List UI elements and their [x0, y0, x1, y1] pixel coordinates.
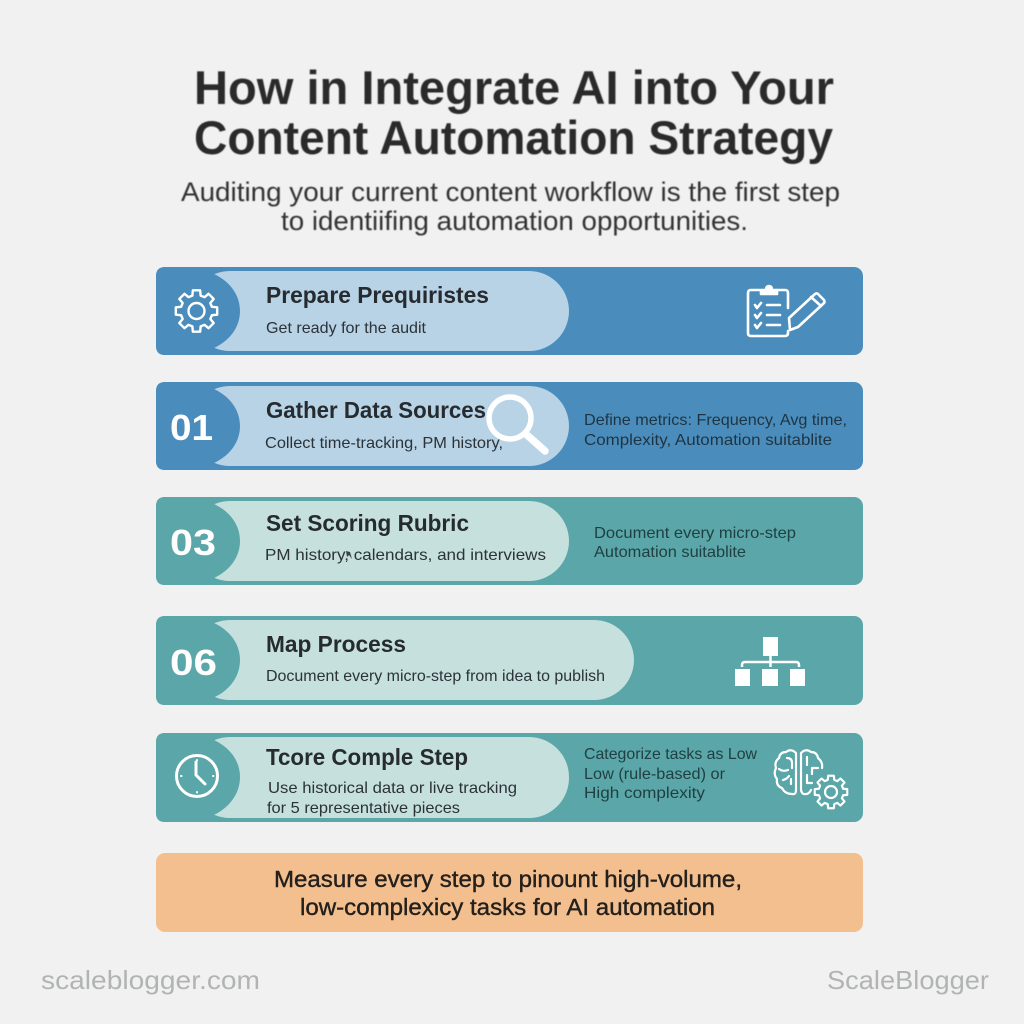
subtitle — [181, 177, 840, 236]
description: prepare: Get ready for the audit — [266, 320, 427, 337]
step number: 01: 01 — [170, 407, 213, 448]
description: score: for 5 representative pieces — [267, 800, 460, 817]
icon: clipboard and pencil — [748, 286, 824, 336]
subtitle: Auditing your current content workflow is the first step — [181, 177, 840, 207]
heading: score: Tcore Comple Step — [266, 744, 468, 770]
footer: website: scaleblogger.com — [41, 965, 260, 995]
side note: document steps — [594, 525, 796, 561]
side note: categorize: Low (rule-based) or — [584, 766, 726, 783]
description: scoring: PM history, calendars, and interviews — [265, 547, 546, 564]
callout: key takeaway: Measure every step to pinount high-volume, — [274, 866, 742, 892]
title: Content Automation Strategy — [194, 111, 833, 164]
icon: magnifying glass — [489, 397, 545, 451]
step number: 06: 06 — [170, 642, 217, 683]
callout: key takeaway: low-complexicy tasks for AI automation — [300, 894, 715, 920]
icon: gear — [176, 290, 217, 332]
heading: scoring: Set Scoring Rubric — [266, 510, 469, 536]
panel: set scoring rubric — [156, 497, 863, 585]
subtitle: to identiifing automation opportunities. — [281, 206, 748, 236]
panel: prepare prerequisites — [156, 267, 863, 355]
side note: categorize: Categorize tasks as Low — [584, 746, 757, 763]
heading: map: Map Process — [266, 631, 406, 657]
callout: key takeaway — [156, 853, 863, 932]
side note: categorize: High complexity — [584, 785, 705, 802]
panel: score complexity — [156, 733, 863, 822]
side note: define metrics: Define metrics: Frequency, Avg time, — [584, 412, 847, 429]
description: map: Document every micro-step from idea to publish — [266, 668, 605, 685]
side note: document steps: Automation suitablite — [594, 544, 746, 561]
icon: clock — [176, 756, 218, 796]
icon: hierarchy — [735, 637, 805, 686]
title — [194, 61, 834, 164]
side note: document steps: Document every micro-step — [594, 525, 796, 542]
panel: map process — [156, 616, 863, 705]
step number: 03: 03 — [170, 522, 216, 563]
heading: prepare: Prepare Prequiristes — [266, 282, 489, 308]
footer: brand: ScaleBlogger — [827, 965, 989, 995]
icon: brain and gear — [775, 750, 847, 808]
description: score: Use historical data or live tracking — [268, 780, 517, 797]
side note: define metrics — [584, 412, 847, 449]
title: How in Integrate AI into Your — [194, 61, 834, 114]
heading: gather: Gather Data Sources — [266, 397, 486, 423]
side note: categorize — [584, 746, 757, 802]
panel: gather data sources — [156, 382, 863, 470]
description: gather: Collect time-tracking, PM history, — [265, 435, 503, 452]
description: score — [267, 780, 517, 817]
side note: define metrics: Complexity, Automation suitablite — [584, 432, 832, 449]
